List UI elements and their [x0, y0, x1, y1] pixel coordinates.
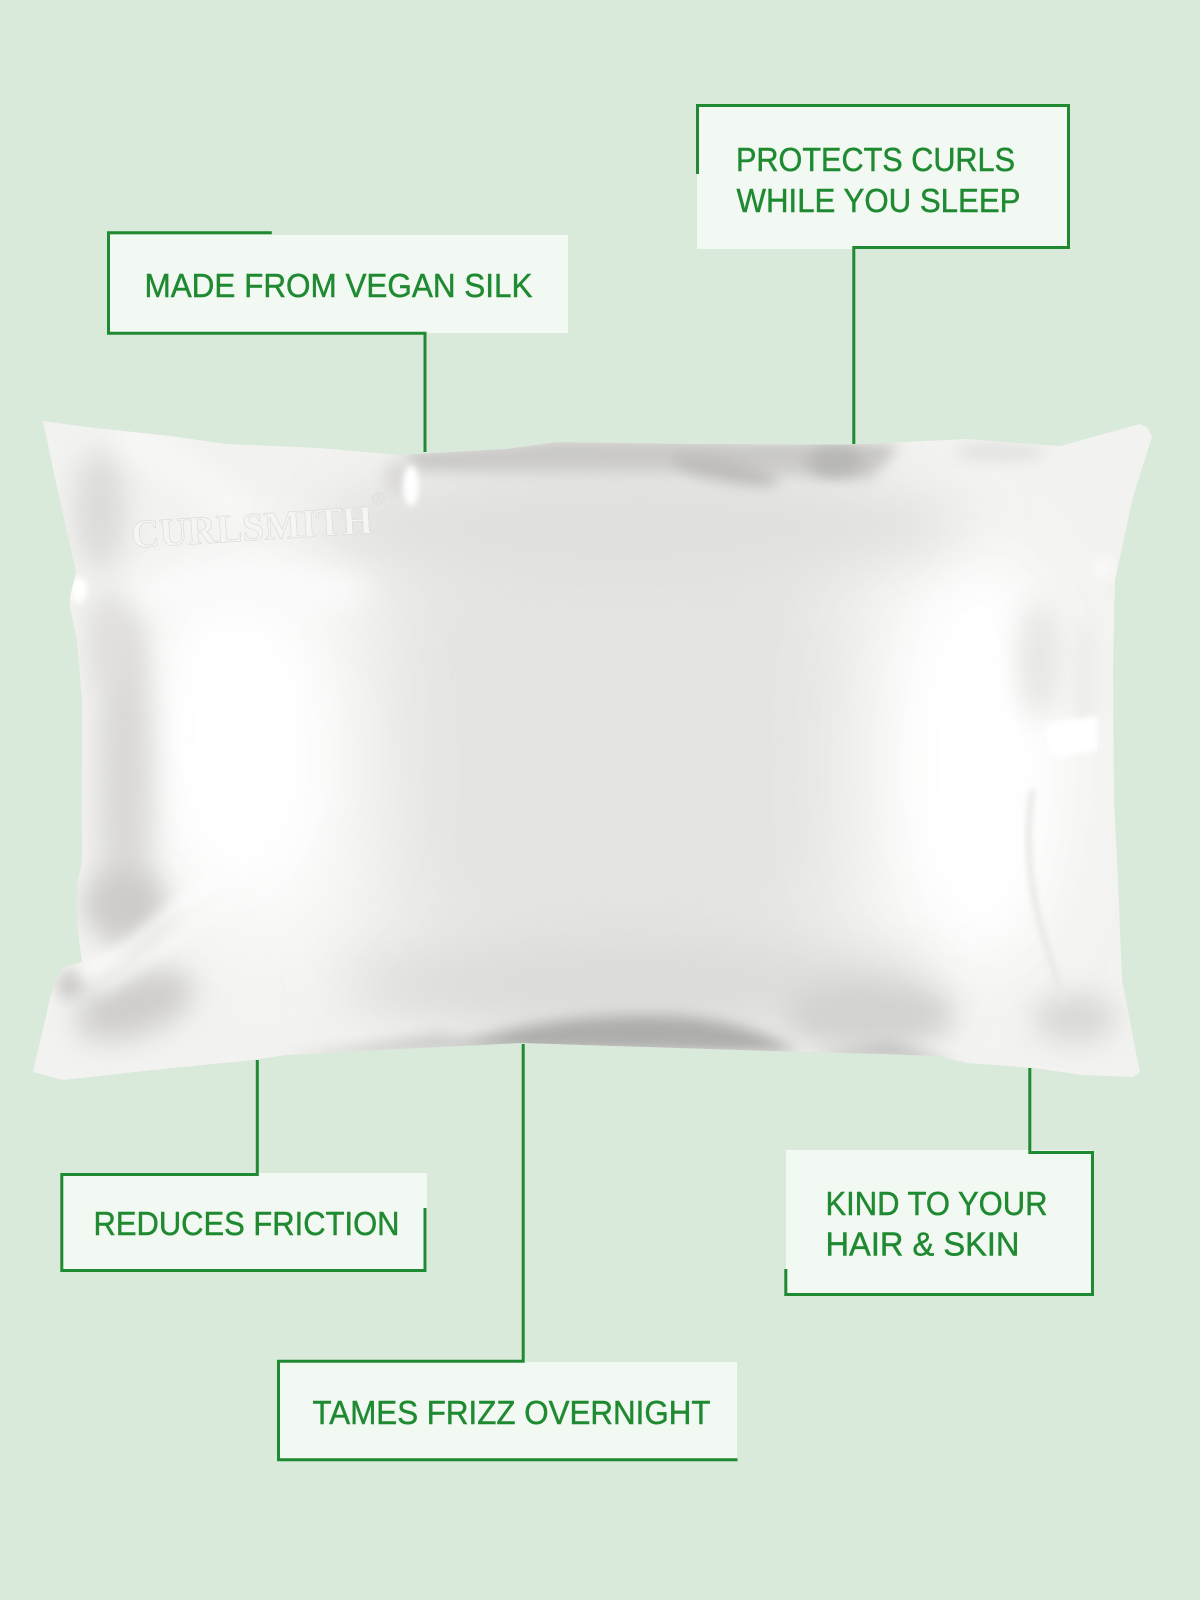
- callout: kind to your hair and skin: [786, 1068, 1092, 1295]
- callout: protects curls while you sleep: PROTECTS CURLS: [736, 141, 1015, 178]
- callout: protects curls while you sleep: [697, 105, 1068, 444]
- callout: tames frizz overnight: [278, 1044, 738, 1460]
- embroidered logo: CURLSMITH: [130, 497, 374, 557]
- top shadow bands: [336, 442, 1036, 564]
- callout: tames frizz overnight: TAMES FRIZZ OVERNIGHT: [312, 1394, 710, 1431]
- left highlight: [246, 629, 372, 910]
- callout: made from vegan silk: [108, 233, 568, 452]
- callout: made from vegan silk: MADE FROM VEGAN SILK: [144, 267, 532, 304]
- embroidered logo: ®: [372, 489, 386, 509]
- soft grey centre of the satin: [387, 576, 848, 938]
- bottom shadow bands: [312, 945, 962, 1058]
- left side folds: [56, 430, 370, 1054]
- right highlight: [853, 602, 924, 904]
- callout: reduces friction: REDUCES FRICTION: [94, 1205, 400, 1242]
- pillow: [20, 410, 1170, 1090]
- callout: kind to your hair and skin: KIND TO YOUR: [826, 1185, 1048, 1222]
- callout: reduces friction: [62, 1060, 427, 1270]
- right side folds: [1018, 557, 1117, 1042]
- callout: kind to your hair and skin: HAIR & SKIN: [826, 1226, 1020, 1262]
- left bump: [72, 578, 87, 602]
- callout: protects curls while you sleep: WHILE YOU SLEEP: [736, 182, 1020, 219]
